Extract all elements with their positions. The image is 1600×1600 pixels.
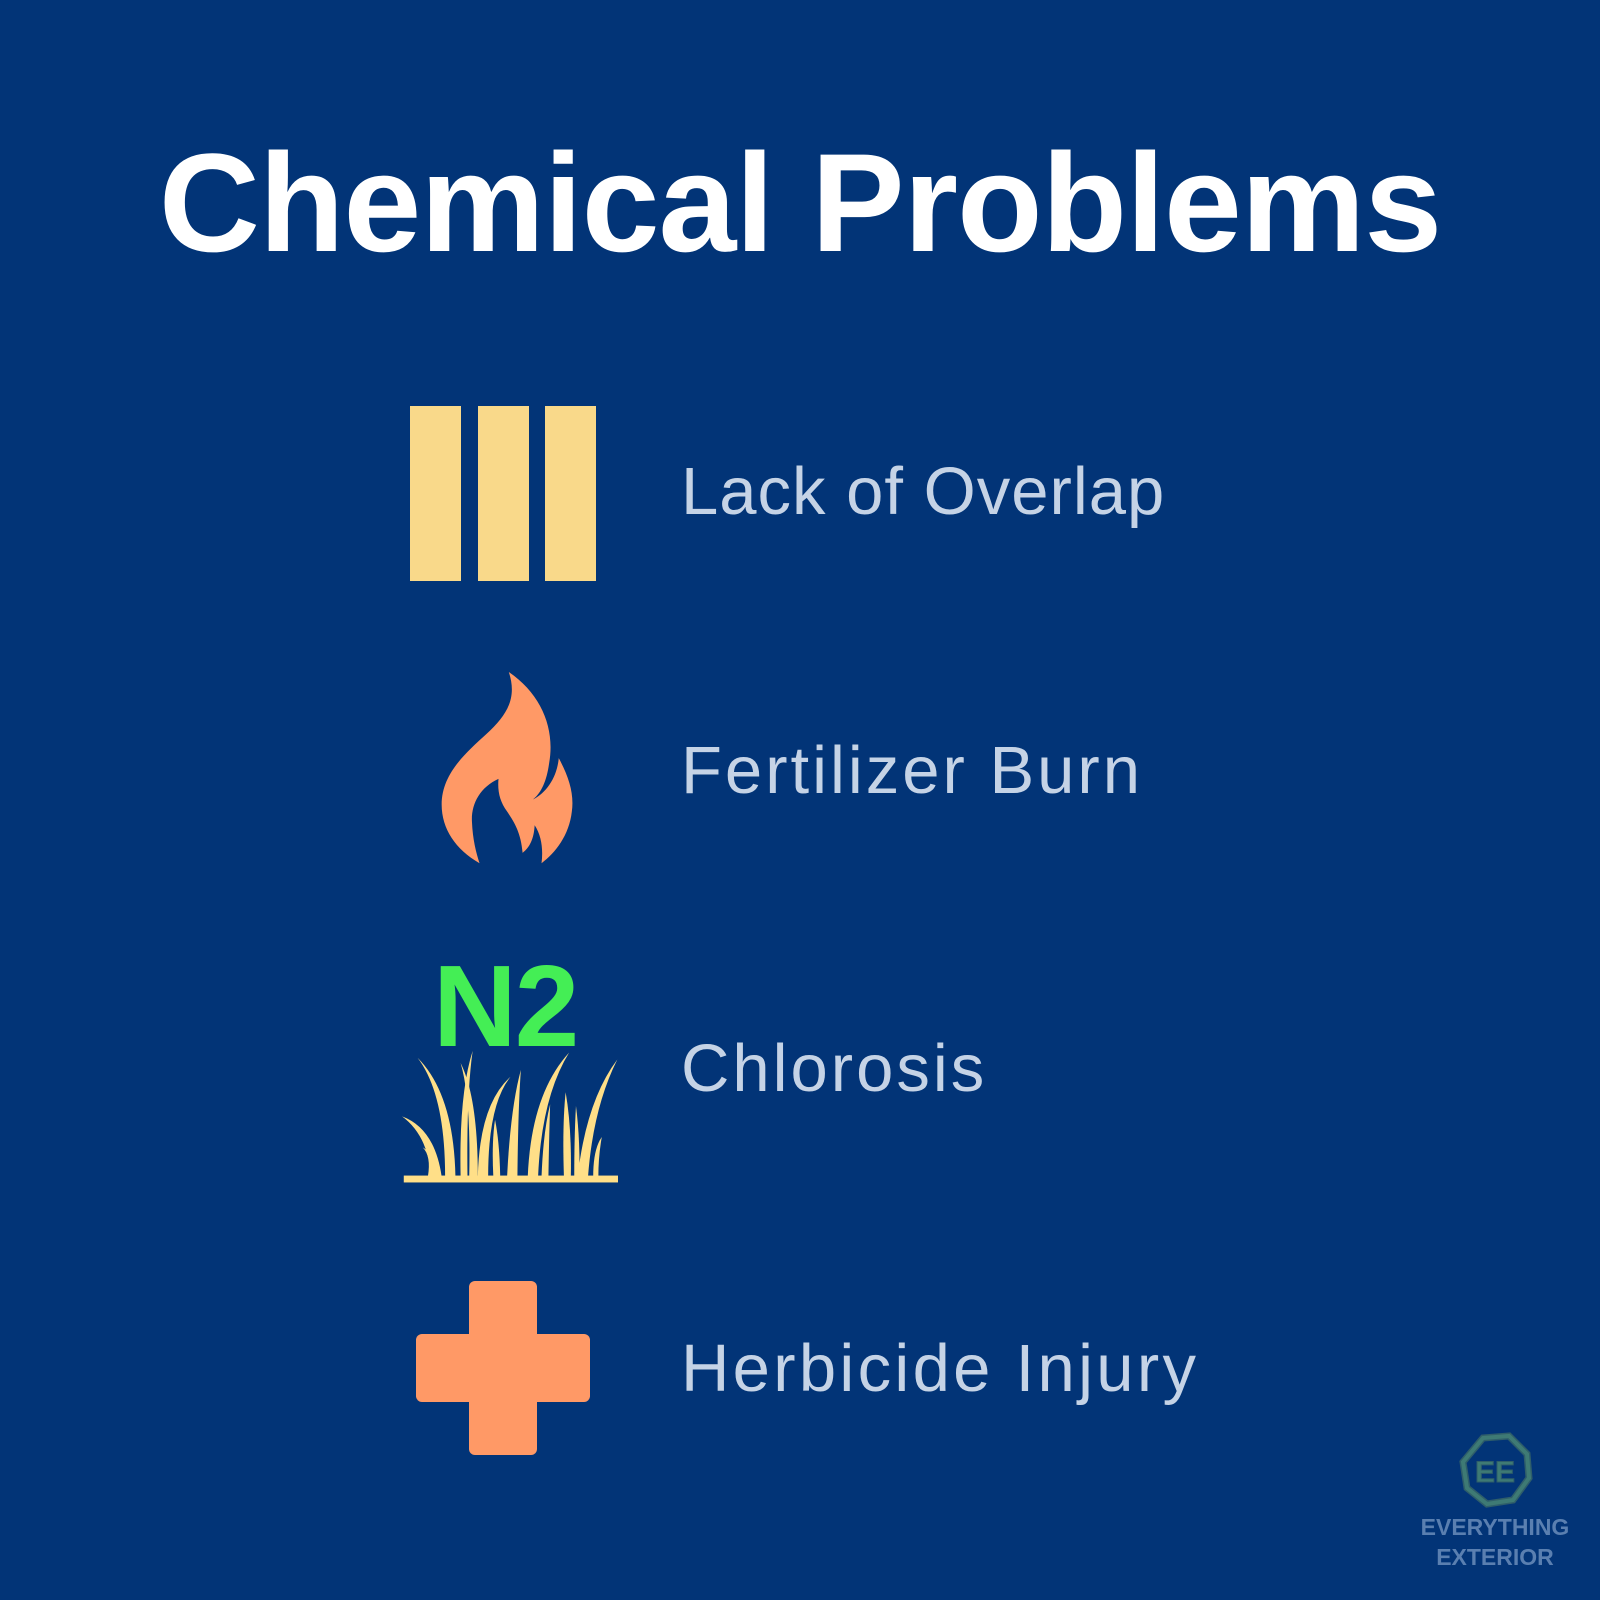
logo badge: EE — [1475, 1456, 1515, 1489]
label: Herbicide Injury: Herbicide Injury — [681, 1331, 1199, 1406]
icon: flame — [442, 672, 572, 864]
icon: N2 over grass — [402, 941, 618, 1182]
N2 text: N2 — [433, 941, 577, 1071]
label: Chlorosis: Chlorosis — [681, 1031, 987, 1106]
logo text: EVERYTHING — [1421, 1514, 1569, 1540]
logo: Everything Exterior — [1421, 1432, 1569, 1570]
grass — [402, 1051, 618, 1182]
title: Chemical Problems — [159, 124, 1441, 281]
label: Fertilizer Burn: Fertilizer Burn — [681, 733, 1143, 808]
label: Lack of Overlap: Lack of Overlap — [681, 454, 1165, 529]
icon: overlap bars — [410, 406, 596, 581]
icon: cross — [416, 1281, 590, 1455]
logo text — [1421, 1514, 1569, 1570]
logo badge — [1459, 1432, 1532, 1508]
logo text: EXTERIOR — [1436, 1544, 1554, 1570]
